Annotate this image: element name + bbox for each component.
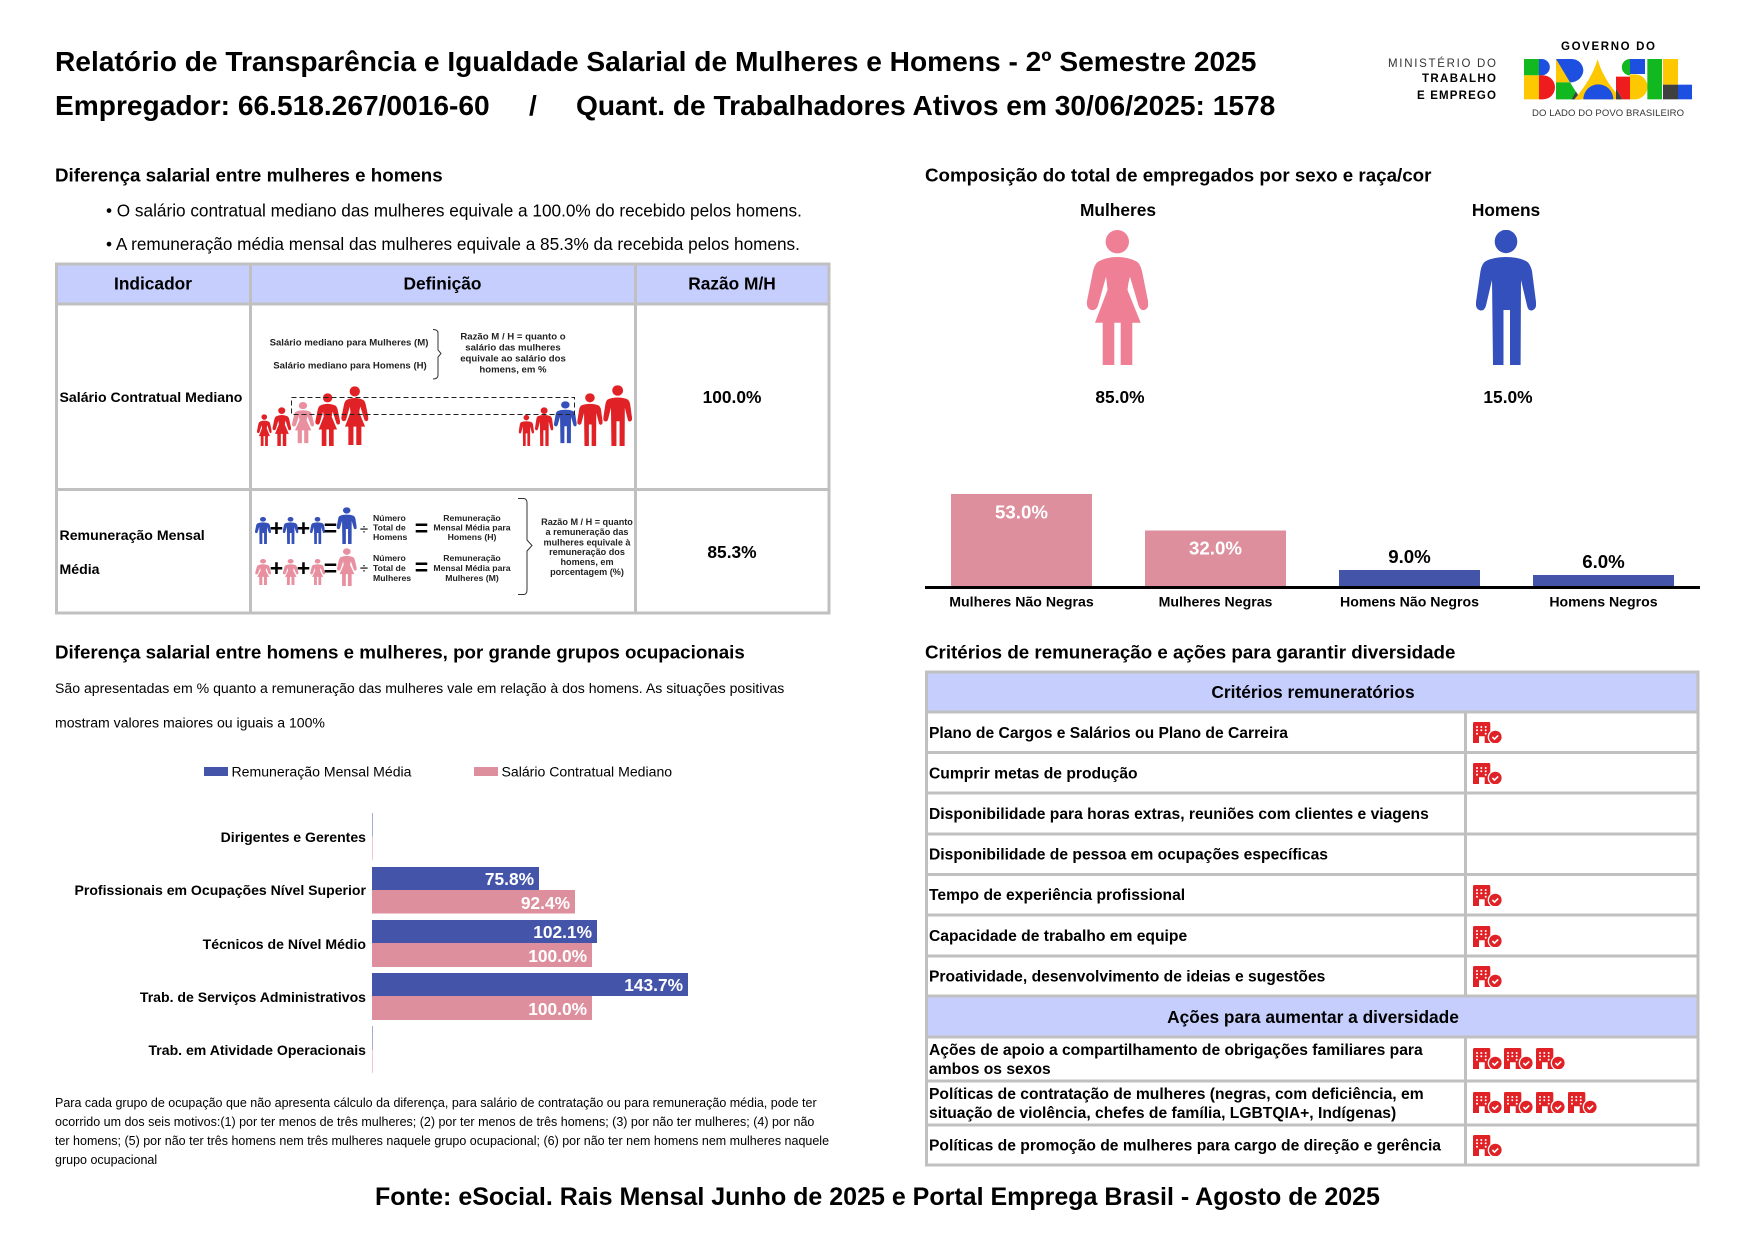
legend: Salário Contratual Mediano xyxy=(502,764,672,780)
diagram: remuneração média: Total de xyxy=(373,563,406,573)
diagram: remuneração média: ÷ xyxy=(360,560,368,577)
bar chart: sexo e raça: Homens Negros xyxy=(1549,594,1658,610)
table: indicadores xyxy=(56,264,829,613)
diagram: remuneração média: mulheres equivale à xyxy=(544,538,631,548)
bar chart: grupos ocupacionais: Profissionais em Ocupações Nível Superior xyxy=(74,882,367,898)
diagram: remuneração média: + xyxy=(270,555,283,581)
table: critérios e ações xyxy=(926,672,1698,1165)
diagram: remuneração média: Homens xyxy=(373,532,407,542)
description text: mostram valores maiores ou iguais a 100% xyxy=(55,714,325,730)
bullet points: • O salário contratual mediano das mulheres equivale a 100.0% do recebido pelos homens. xyxy=(106,200,802,220)
panel: mulheres: Mulheres xyxy=(1080,200,1156,220)
table: critérios e ações: Cumprir metas de produção xyxy=(929,766,1138,782)
diagram: remuneração média: = xyxy=(415,554,428,580)
table: critérios e ações: Políticas de contratação de mulheres (negras, com deficiência, em xyxy=(929,1086,1424,1103)
bar chart: grupos ocupacionais: Trab. de Serviços Administrativos xyxy=(140,989,366,1005)
heading: composição: Composição do total de empregados por sexo e raça/cor xyxy=(925,164,1432,186)
diagram: remuneração média: remuneração dos xyxy=(549,547,625,557)
heading: diferença por grupos ocupacionais: Diferença salarial entre homens e mulheres, por grande grupos ocupacionais xyxy=(55,642,745,662)
footnote: Para cada grupo de ocupação que não apresenta cálculo da diferença, para salário de contratação ou para remuneração média, pode ter xyxy=(55,1096,817,1110)
footnote: ocorrido um dos seis motivos:(1) por ter menos de três mulheres; (2) por ter menos de três homens; (3) por não ter mulheres; (4) por não xyxy=(55,1115,814,1129)
logo: ministério e governo do Brasil: E EMPREGO xyxy=(1417,90,1496,102)
diagram: remuneração média: Razão M / H = quanto xyxy=(541,517,633,527)
title: / xyxy=(529,90,537,121)
row value: remuneração: 85.3% xyxy=(707,542,757,562)
bar chart: sexo e raça: Mulheres Negras xyxy=(1159,594,1273,610)
table: critérios e ações: ambos os sexos xyxy=(929,1061,1051,1078)
diagram: remuneração média: Homens (H) xyxy=(448,532,496,542)
diagram: remuneração média: = xyxy=(324,555,337,581)
title: Empregador: 66.518.267/0016-60 xyxy=(55,90,490,121)
table: critérios e ações: situação de violência, chefes de família, LGBTQIA+, Indígenas) xyxy=(929,1105,1396,1122)
diagram: remuneração média: Mulheres (M) xyxy=(445,573,499,583)
bar chart: grupos ocupacionais: Trab. em Atividade Operacionais xyxy=(148,1042,366,1058)
logo: ministério e governo do Brasil: TRABALHO xyxy=(1422,73,1496,85)
diagram: remuneração média: homens, em xyxy=(560,557,614,567)
table: indicadores: Razão M/H xyxy=(688,274,776,294)
footnote: grupo ocupacional xyxy=(55,1153,157,1167)
bar chart: grupos ocupacionais xyxy=(74,813,688,1073)
panel: homens xyxy=(1472,200,1540,407)
logo: ministério e governo do Brasil xyxy=(1388,41,1692,119)
logo: ministério e governo do Brasil: DO LADO DO POVO BRASILEIRO xyxy=(1532,108,1684,119)
icons: empresas xyxy=(1473,722,1598,1158)
table: indicadores: Indicador xyxy=(114,274,192,294)
bar chart: sexo e raça: 9.0% xyxy=(1388,546,1431,567)
bar chart: sexo e raça xyxy=(925,494,1700,610)
bar chart: grupos ocupacionais: 75.8% xyxy=(485,869,534,889)
logo: ministério e governo do Brasil: MINISTÉRIO DO xyxy=(1388,57,1496,70)
table: critérios e ações: Capacidade de trabalho em equipe xyxy=(929,928,1187,945)
table: critérios e ações: Critérios remuneratórios xyxy=(1211,682,1415,702)
row label: salário contratual mediano: Salário Contratual Mediano xyxy=(60,389,243,405)
diagram: remuneração média: Número xyxy=(373,513,406,523)
diagram: remuneração média: Total de xyxy=(373,522,406,532)
bar chart: grupos ocupacionais: 92.4% xyxy=(521,893,570,913)
diagram: salário mediano xyxy=(257,330,632,446)
legend: Remuneração Mensal Média xyxy=(232,764,412,780)
table: critérios e ações: Plano de Cargos e Salários ou Plano de Carreira xyxy=(929,725,1288,742)
panel: homens: 15.0% xyxy=(1483,387,1533,407)
table: critérios e ações: Disponibilidade para horas extras, reuniões com clientes e viagens xyxy=(929,806,1429,823)
title: Relatório de Transparência e Igualdade Salarial de Mulheres e Homens - 2º Semestre 2025 xyxy=(55,46,1256,77)
diagram: remuneração média: Remuneração xyxy=(443,553,501,563)
diagram: remuneração média: = xyxy=(415,515,428,541)
bar chart: grupos ocupacionais: Técnicos de Nível Médio xyxy=(203,936,366,952)
diagram: salário mediano: Salário mediano para Mulheres (M) xyxy=(270,338,428,348)
bar chart: sexo e raça: Mulheres Não Negras xyxy=(949,594,1094,610)
bar chart: grupos ocupacionais: Dirigentes e Gerentes xyxy=(221,829,366,845)
heading: critérios: Critérios de remuneração e ações para garantir diversidade xyxy=(925,642,1455,662)
source line: Fonte: eSocial. Rais Mensal Junho de 2025 e Portal Emprega Brasil - Agosto de 2025 xyxy=(375,1183,1380,1211)
heading: diferença salarial: Diferença salarial entre mulheres e homens xyxy=(55,164,443,186)
bar chart: sexo e raça: 53.0% xyxy=(995,502,1048,522)
diagram: remuneração média: Mensal Média para xyxy=(433,522,511,532)
logo: ministério e governo do Brasil: GOVERNO DO xyxy=(1561,41,1655,53)
bar chart: grupos ocupacionais: 102.1% xyxy=(533,922,592,942)
table: critérios e ações: Políticas de promoção de mulheres para cargo de direção e gerência xyxy=(929,1138,1441,1154)
diagram: remuneração média: + xyxy=(270,515,283,541)
diagram: salário mediano: salário das mulheres xyxy=(465,342,561,354)
panel: homens: Homens xyxy=(1472,200,1540,220)
bar chart: grupos ocupacionais: 100.0% xyxy=(528,999,587,1019)
diagram: remuneração média: = xyxy=(324,515,337,541)
row label: remuneração mensal média: Remuneração Mensal xyxy=(60,527,205,543)
title xyxy=(55,46,1275,121)
diagram: remuneração média: Número xyxy=(373,553,406,563)
row label: remuneração mensal média: Média xyxy=(60,561,100,577)
diagram: remuneração média: Remuneração xyxy=(443,513,501,523)
diagram: remuneração média: Mulheres xyxy=(373,573,411,583)
table: critérios e ações: Disponibilidade de pessoa em ocupações específicas xyxy=(929,846,1328,864)
diagram: remuneração média: a remuneração das xyxy=(546,527,628,537)
bar chart: grupos ocupacionais: 143.7% xyxy=(624,975,683,995)
table: indicadores: Definição xyxy=(404,274,482,294)
legend xyxy=(204,764,672,780)
panel: mulheres xyxy=(1080,200,1156,407)
table: critérios e ações: Ações para aumentar a diversidade xyxy=(1167,1007,1459,1027)
description text: São apresentadas em % quanto a remuneração das mulheres vale em relação à dos homens. As situações positivas xyxy=(55,680,784,696)
bar chart: grupos ocupacionais: 100.0% xyxy=(528,946,587,966)
description text xyxy=(55,680,784,730)
title: Quant. de Trabalhadores Ativos em 30/06/2025: 1578 xyxy=(576,90,1275,121)
diagram: salário mediano: homens, em % xyxy=(479,364,547,376)
diagram: remuneração média: porcentagem (%) xyxy=(550,567,624,577)
bar chart: sexo e raça: Homens Não Negros xyxy=(1340,594,1479,610)
bar chart: sexo e raça: 6.0% xyxy=(1582,551,1625,572)
table: critérios e ações: Proatividade, desenvolvimento de ideias e sugestões xyxy=(929,968,1326,986)
diagram: salário mediano: Salário mediano para Homens (H) xyxy=(273,360,427,372)
panel: mulheres: 85.0% xyxy=(1095,387,1145,407)
footnote: ter homens; (5) por não ter três homens nem três mulheres naquele grupo ocupacional; (6) por não ter nem homens nem mulheres naquele xyxy=(55,1134,829,1148)
diagram: salário mediano: equivale ao salário dos xyxy=(460,354,566,364)
table: critérios e ações: Tempo de experiência profissional xyxy=(929,887,1185,904)
bullet points: • A remuneração média mensal das mulheres equivale a 85.3% da recebida pelos homens. xyxy=(106,234,800,254)
bar chart: sexo e raça: 32.0% xyxy=(1189,538,1242,558)
diagram: remuneração média: + xyxy=(297,555,310,581)
row value: salário: 100.0% xyxy=(703,387,761,407)
diagram: remuneração média xyxy=(255,498,633,594)
table: critérios e ações: Ações de apoio a compartilhamento de obrigações familiares para xyxy=(929,1042,1423,1059)
footnote xyxy=(55,1096,829,1167)
diagram: remuneração média: + xyxy=(297,515,310,541)
diagram: salário mediano: Razão M / H = quanto o xyxy=(460,332,566,342)
diagram: remuneração média: Mensal Média para xyxy=(433,563,511,573)
diagram: remuneração média: ÷ xyxy=(360,521,368,538)
bullet points xyxy=(106,200,802,254)
